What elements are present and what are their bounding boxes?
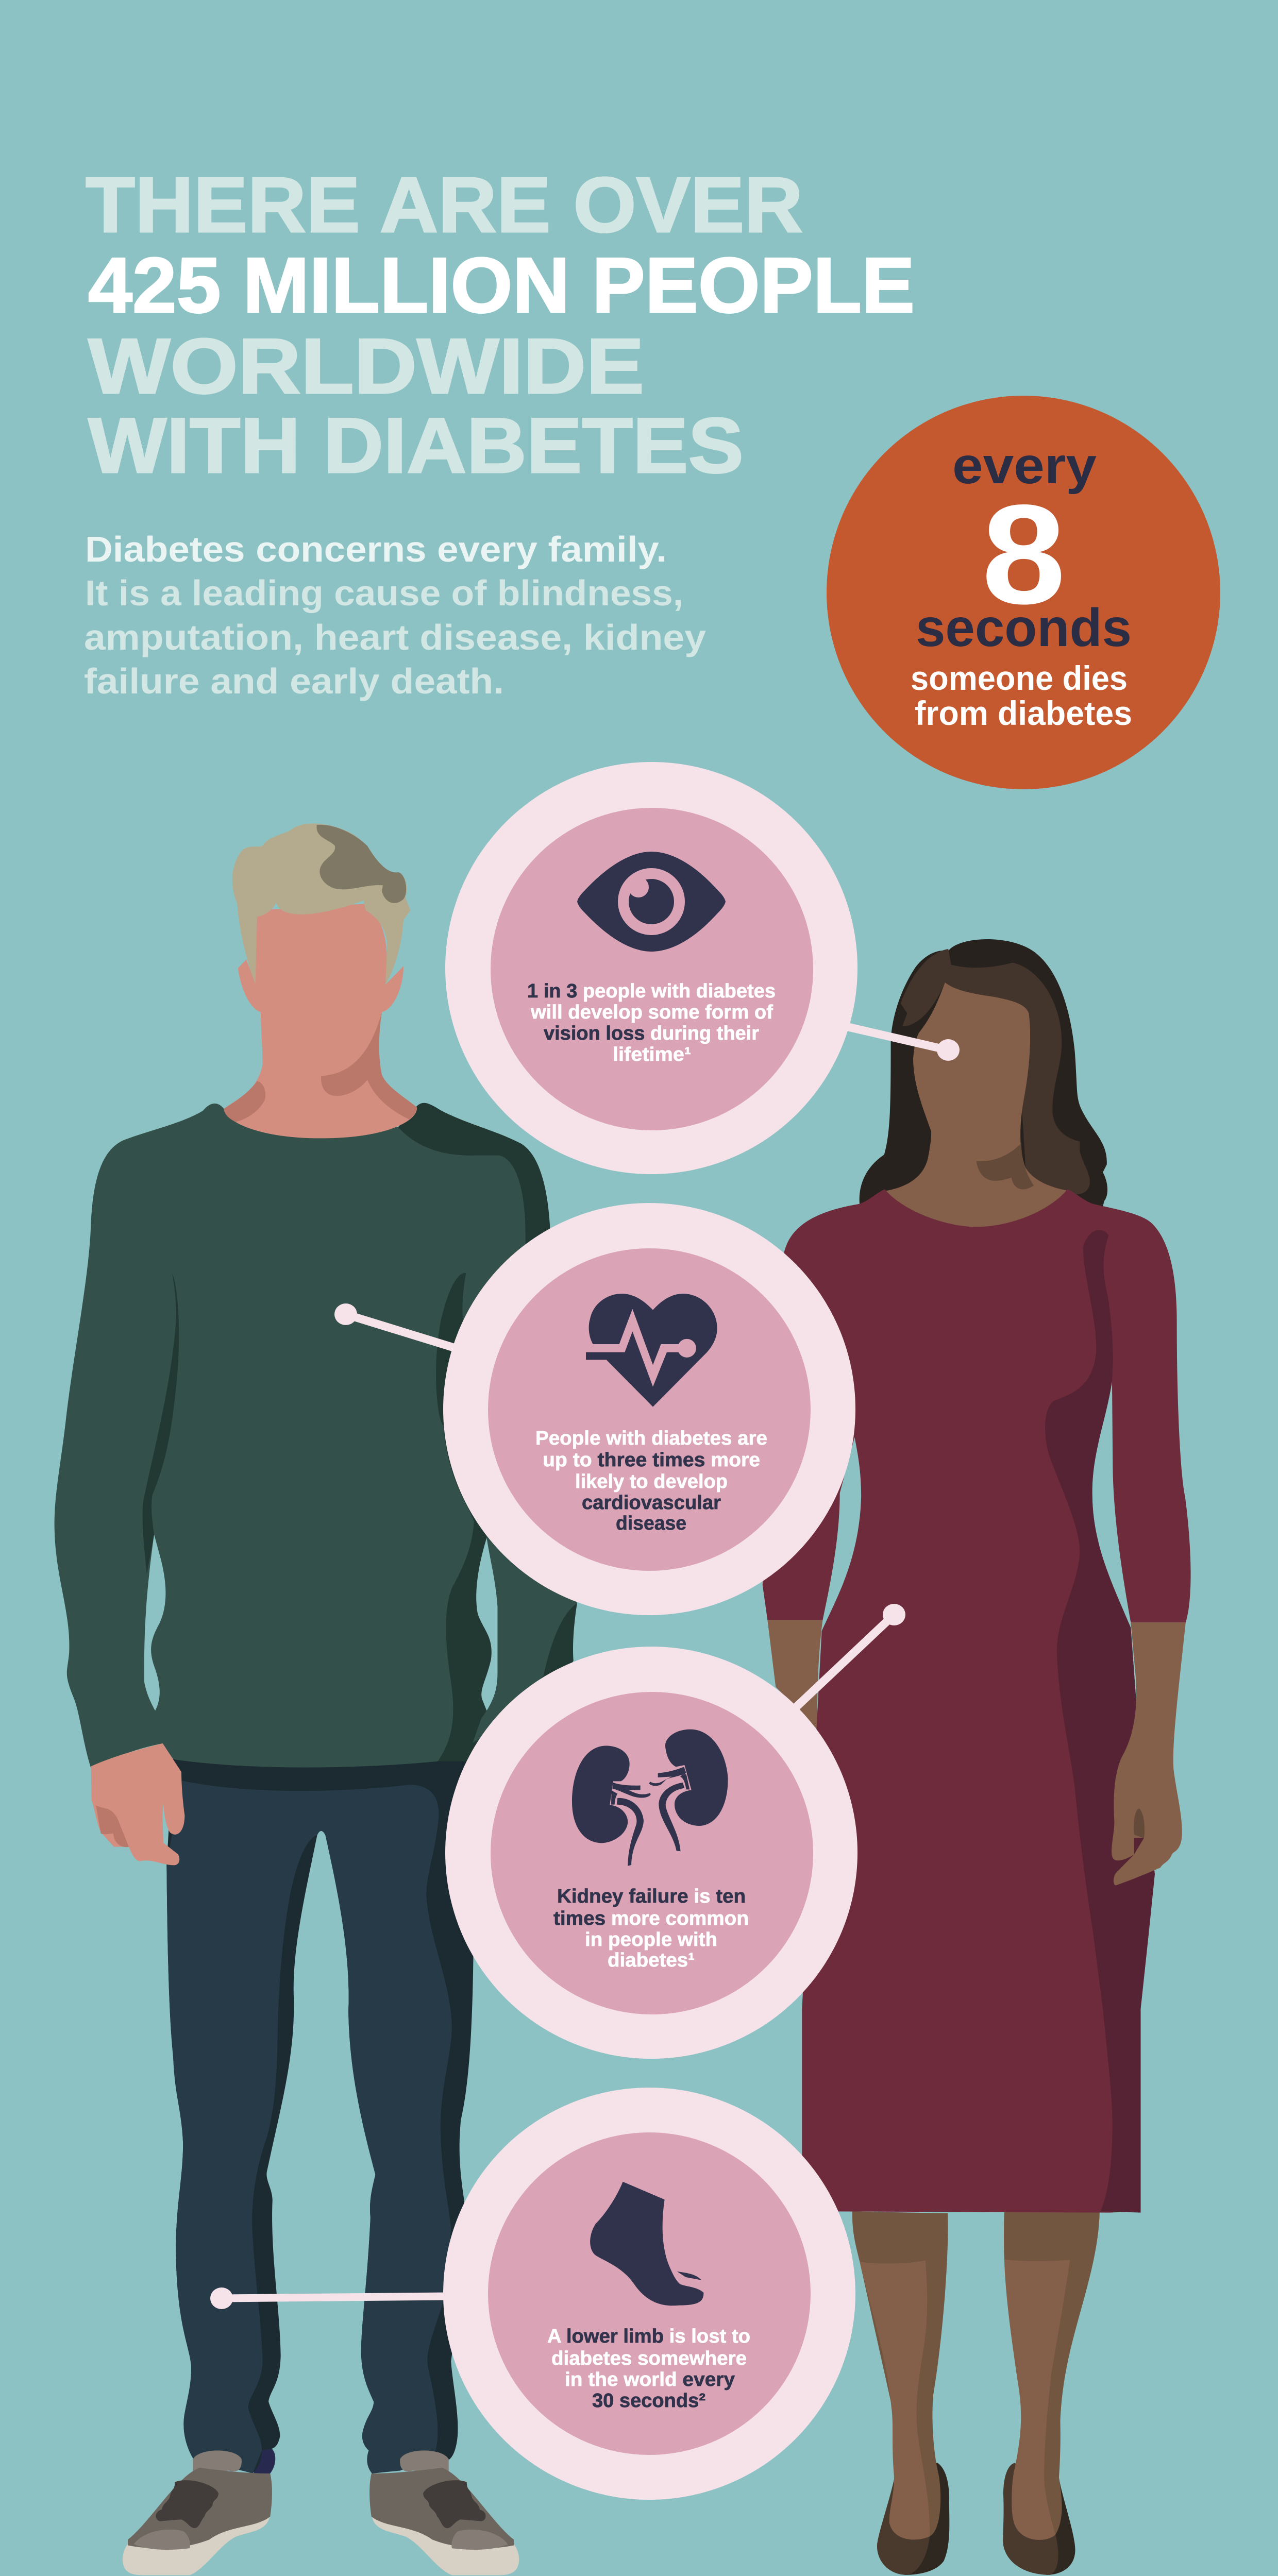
- panel: vision loss: [445, 762, 857, 1174]
- cardiovascular text: disease: [616, 1513, 686, 1534]
- vision loss text: [527, 980, 776, 1065]
- cardiovascular text: People with diabetes are: [535, 1428, 767, 1449]
- lower limb text: diabetes somewhere: [551, 2348, 747, 2369]
- callout: every 8 seconds: someone dies: [911, 659, 1128, 697]
- panel: cardiovascular disease: [443, 1203, 855, 1615]
- cardiovascular text: [535, 1428, 767, 1534]
- lower limb text: in the world every: [565, 2369, 735, 2391]
- intro text block: [84, 529, 706, 701]
- vision loss text: lifetime¹: [613, 1044, 691, 1065]
- intro text block: amputation, heart disease, kidney: [84, 617, 706, 657]
- connector: foot: [210, 2287, 448, 2309]
- kidney text: [553, 1886, 749, 1971]
- woman legs and shoes: [852, 2211, 1100, 2575]
- man head and sweater: [55, 824, 577, 1768]
- woman head and dress: [763, 939, 1191, 2213]
- title: WITH DIABETES: [88, 402, 744, 489]
- kidney text: diabetes¹: [608, 1950, 695, 1971]
- callout: every 8 seconds: from diabetes: [915, 694, 1132, 732]
- vision loss text: vision loss during their: [544, 1023, 759, 1044]
- connector: kidney: [794, 1604, 905, 1709]
- icon: eye: [577, 852, 726, 952]
- vision loss text: 1 in 3 people with diabetes: [527, 980, 776, 1002]
- figure: man: [55, 824, 577, 2575]
- icon: foot: [590, 2182, 703, 2306]
- callout: every 8 seconds: 8: [982, 476, 1066, 634]
- lower limb text: A lower limb is lost to: [547, 2326, 750, 2347]
- figure: woman: [763, 939, 1191, 2575]
- title: THERE ARE OVER: [86, 161, 803, 249]
- man trousers and shoes: [123, 1758, 519, 2575]
- lower limb text: [547, 2326, 750, 2412]
- kidney text: Kidney failure is ten: [557, 1886, 746, 1907]
- intro text block: Diabetes concerns every family.: [85, 529, 667, 569]
- intro text block: It is a leading cause of blindness,: [85, 573, 683, 613]
- callout: every 8 seconds: [827, 396, 1220, 789]
- intro text block: failure and early death.: [84, 661, 504, 701]
- kidney text: times more common: [553, 1908, 749, 1929]
- connector: heart: [334, 1303, 456, 1348]
- vision loss text: will develop some form of: [530, 1002, 773, 1023]
- title: 425 MILLION PEOPLE: [88, 242, 915, 329]
- cardiovascular text: likely to develop: [575, 1471, 728, 1493]
- callout: every 8 seconds: seconds: [916, 598, 1132, 658]
- man hand: [91, 1743, 184, 1865]
- cardiovascular text: cardiovascular: [582, 1492, 721, 1514]
- kidney text: in people with: [585, 1929, 717, 1951]
- title: [86, 161, 915, 489]
- panel: lower limb: [443, 2088, 855, 2500]
- title: WORLDWIDE: [88, 323, 644, 410]
- icon: kidneys: [572, 1730, 728, 1866]
- panel: kidney failure: [445, 1647, 857, 2059]
- icon: heart with pulse: [586, 1294, 717, 1407]
- connector: eye: [845, 1026, 960, 1061]
- cardiovascular text: up to three times more: [543, 1449, 760, 1471]
- callout: every 8 seconds: every: [952, 437, 1097, 495]
- lower limb text: 30 seconds²: [592, 2390, 705, 2412]
